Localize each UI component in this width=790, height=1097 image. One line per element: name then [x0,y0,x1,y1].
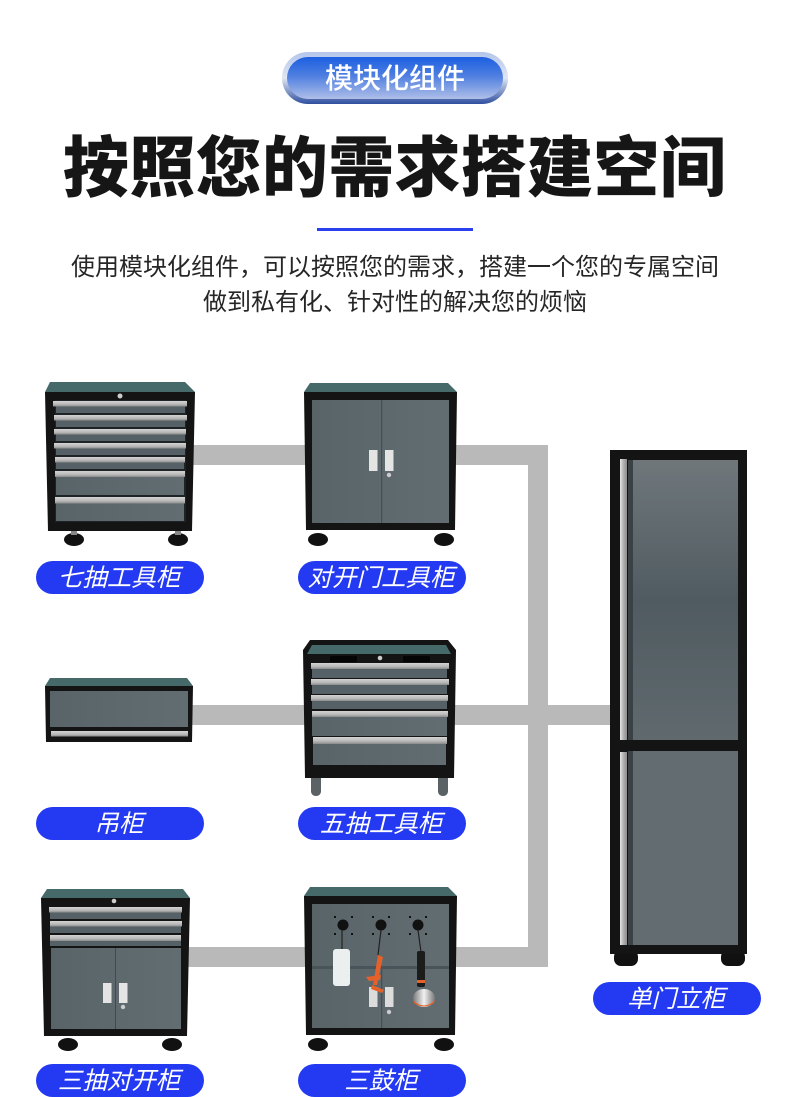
label: 五抽工具柜 [298,807,466,840]
label: 七抽工具柜: 七抽工具柜 [58,565,184,592]
label: 单门立柜 [593,982,761,1015]
cabinet: three drawers and double door [41,889,190,1051]
intro text: 做到私有化、针对性的解决您的烦恼 [203,289,587,316]
label: 三抽对开柜 [36,1064,204,1097]
label: 三抽对开柜: 三抽对开柜 [58,1068,184,1095]
label: 吊柜 [36,807,204,840]
badge: 模块化组件: 模块化组件 [325,63,465,94]
cabinet: double door [304,383,457,546]
label: 吊柜: 吊柜 [94,811,147,838]
badge: 模块化组件 [282,52,508,104]
label: 三鼓柜: 三鼓柜 [344,1068,421,1095]
cabinet: tall single door [610,450,747,966]
label: 七抽工具柜 [36,561,204,594]
title: 按照您的需求搭建空间 [63,131,726,205]
label: 三鼓柜 [298,1064,466,1097]
cabinet: wall hung [45,678,193,742]
connector lines [186,445,612,967]
blue divider line [317,228,473,231]
intro text [71,254,719,316]
label: 五抽工具柜: 五抽工具柜 [320,811,446,838]
label: 对开门工具柜: 对开门工具柜 [308,565,458,592]
intro text: 使用模块化组件，可以按照您的需求，搭建一个您的专属空间 [71,254,719,281]
label: 单门立柜: 单门立柜 [627,986,728,1013]
cabinet: five drawers with casters [303,640,456,796]
cabinet: pegboard [304,887,457,1051]
cabinet: seven drawers [45,382,195,546]
